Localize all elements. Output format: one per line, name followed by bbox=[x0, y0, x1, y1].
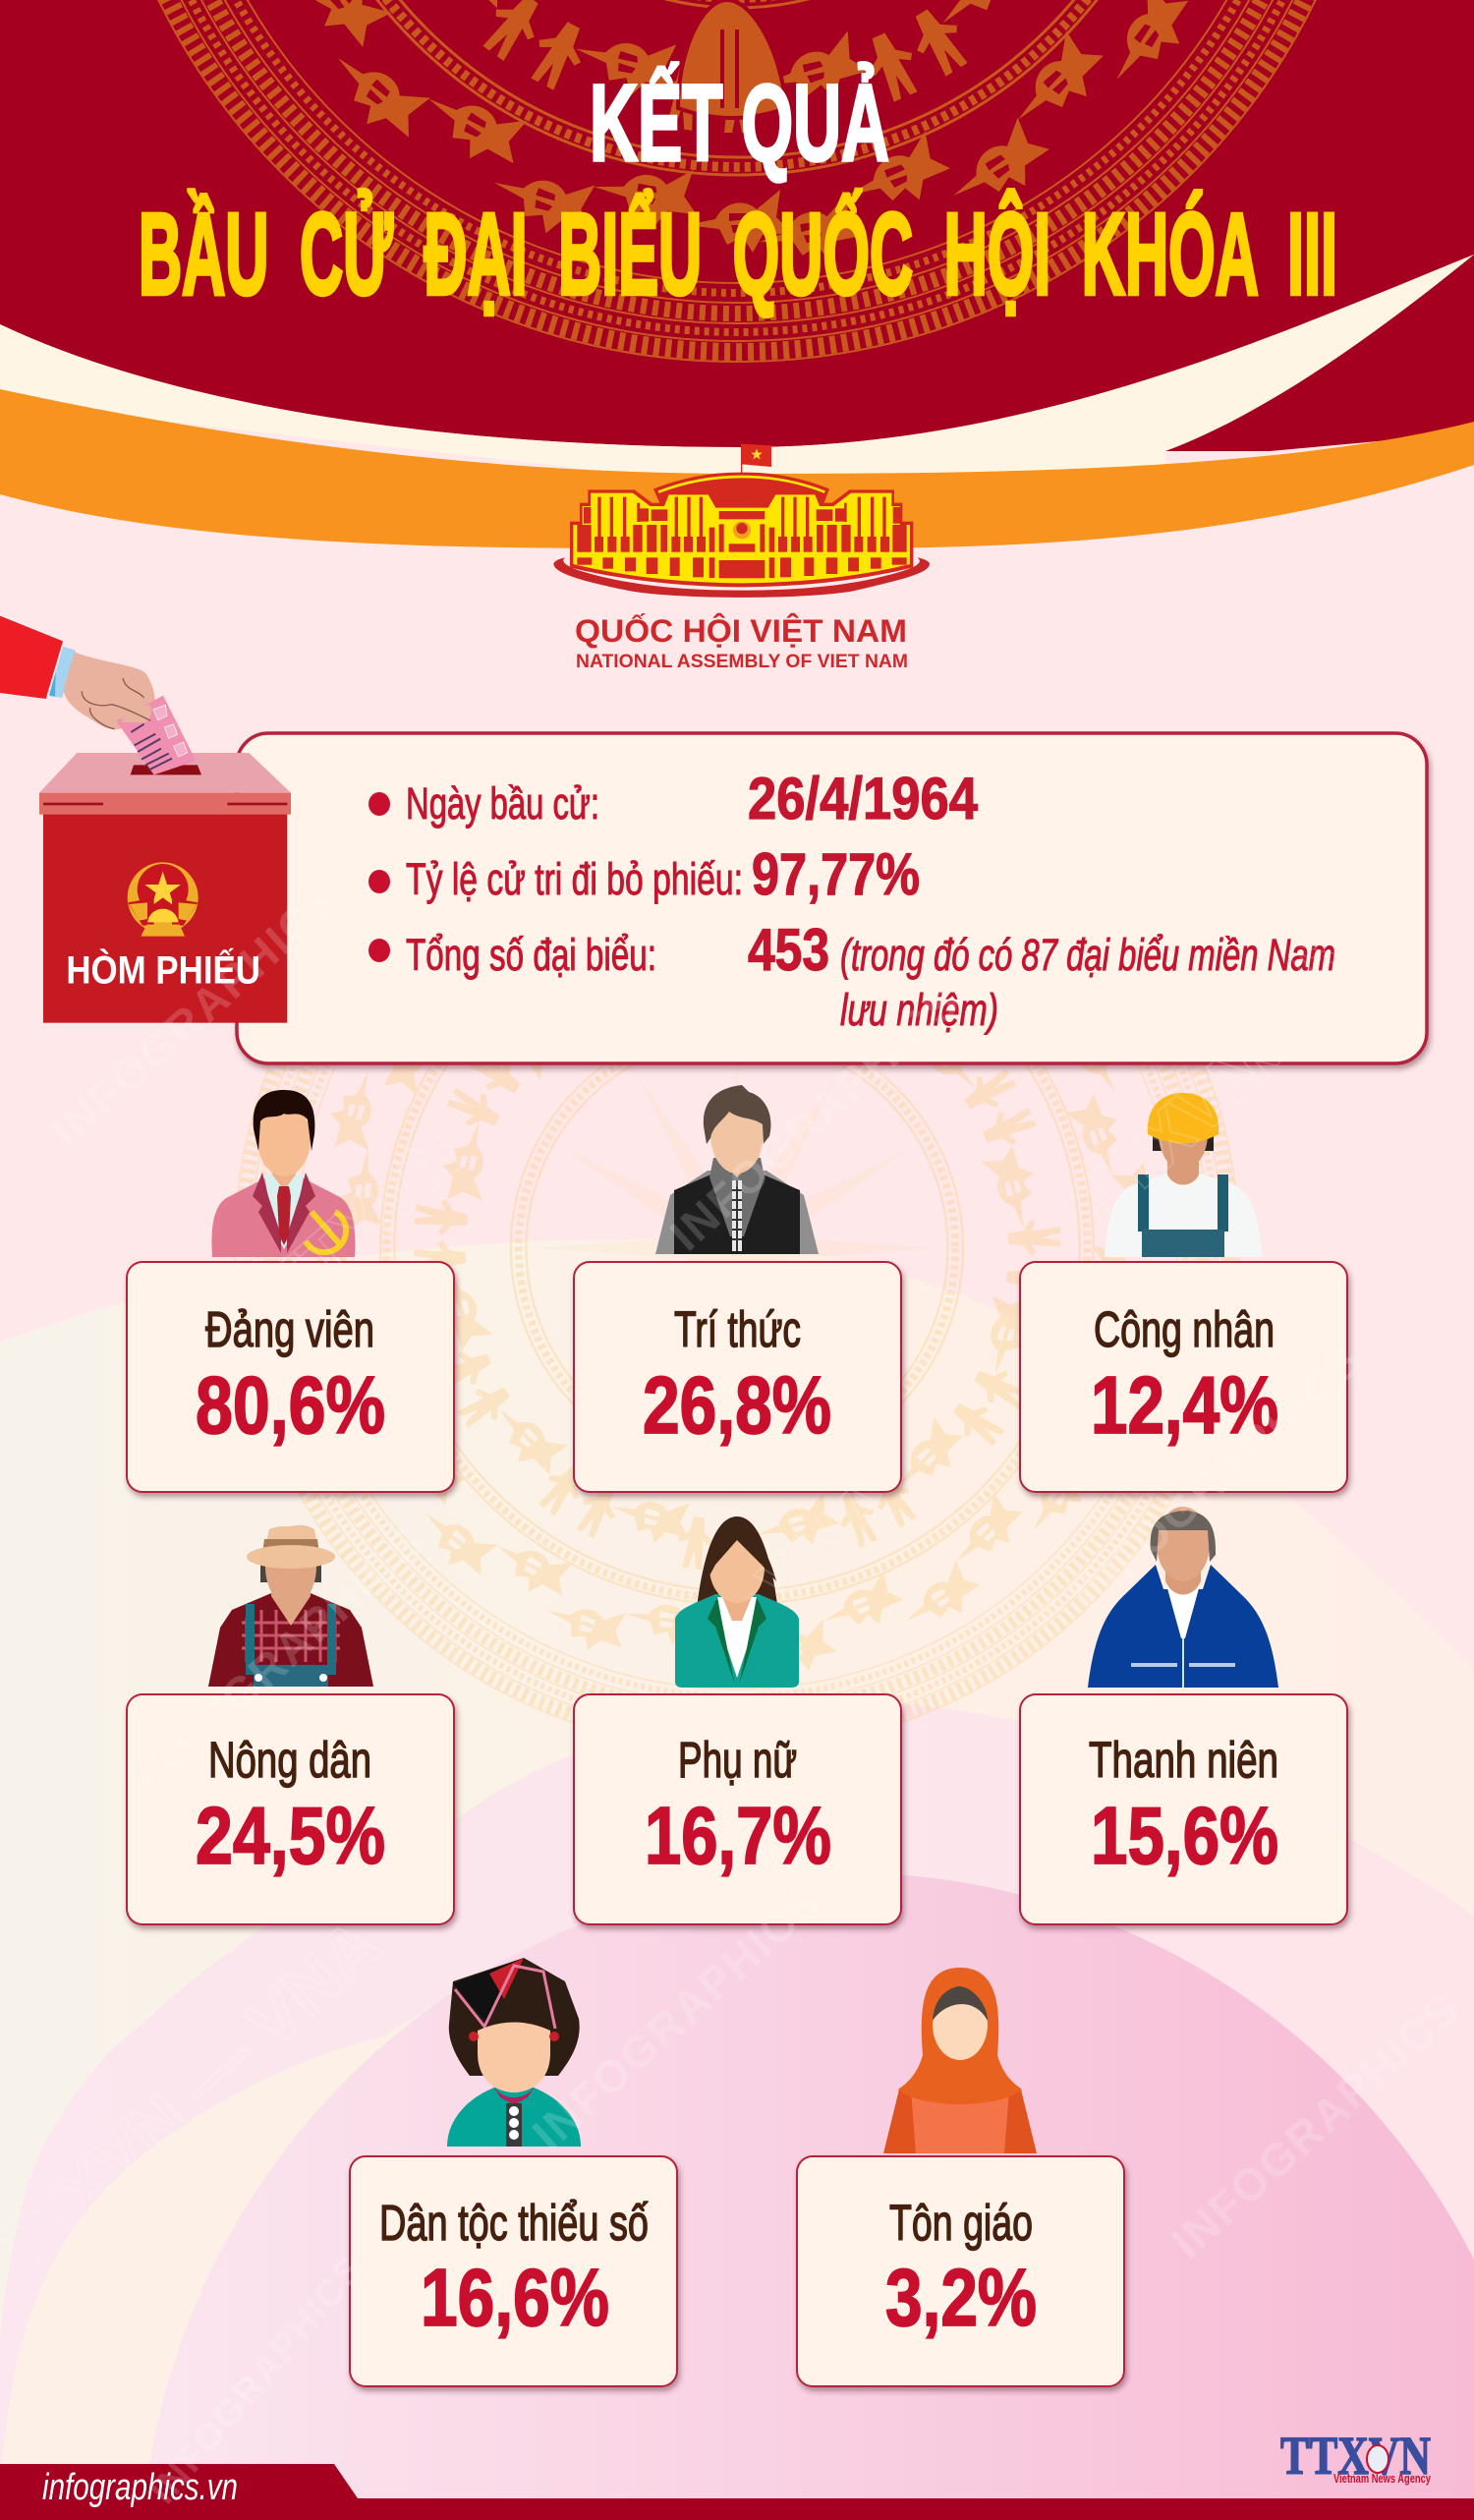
card: workers: Công nhân bbox=[1094, 1301, 1275, 1357]
card: party members: 80,6% bbox=[196, 1359, 385, 1451]
card: party members: Đảng viên bbox=[205, 1301, 374, 1357]
icon: parliament building bbox=[553, 444, 930, 598]
background: cream band bbox=[2, 1912, 688, 2496]
cream swoosh bbox=[0, 255, 1474, 487]
watermarks: INFOGRAPHICS bbox=[1162, 1982, 1471, 2267]
election date row bbox=[368, 766, 979, 831]
card: farmers: Nông dân bbox=[208, 1732, 371, 1788]
panel: election facts bbox=[237, 733, 1427, 1063]
top red banner bbox=[0, 0, 1474, 447]
card: religion: Tôn giáo bbox=[889, 2195, 1033, 2251]
person: farmer bbox=[208, 1525, 373, 1687]
red wedge on right bbox=[1165, 255, 1474, 451]
card: workers bbox=[1020, 1262, 1347, 1492]
watermarks: INFOGRAPHICS bbox=[142, 2248, 373, 2512]
card: workers: 12,4% bbox=[1091, 1359, 1278, 1451]
person: party member bbox=[211, 1090, 355, 1257]
bronze drum pattern in banner bbox=[93, 0, 1381, 362]
icon: national emblem bbox=[128, 862, 198, 937]
card: intellectuals bbox=[574, 1262, 901, 1492]
election date row: 26/4/1964 bbox=[748, 766, 979, 831]
card: women: 16,7% bbox=[645, 1790, 831, 1881]
card: party members bbox=[127, 1262, 454, 1492]
card: youth: 15,6% bbox=[1091, 1790, 1278, 1881]
watermarks: INFOGRAPHICS bbox=[1063, 1334, 1373, 1619]
person: youth bbox=[1088, 1507, 1278, 1688]
watermarks bbox=[0, 872, 1471, 2512]
card: farmers bbox=[127, 1694, 454, 1924]
person: religious follower bbox=[883, 1968, 1037, 2153]
election date row: Ngày bầu cử: bbox=[406, 778, 599, 829]
card: religion: 3,2% bbox=[885, 2252, 1037, 2343]
turnout row: Tỷ lệ cử tri đi bỏ phiếu: bbox=[406, 854, 743, 904]
card: youth bbox=[1020, 1694, 1347, 1924]
footer website: infographics.vn bbox=[42, 2467, 238, 2508]
background: large pink circle bbox=[142, 1872, 1474, 2520]
total delegates row: 453 bbox=[748, 917, 829, 983]
icon: ballot box with hand bbox=[0, 616, 291, 1023]
background: cream arc bbox=[0, 1239, 1474, 2520]
TTXVN agency logo: TTXVN bbox=[1280, 2426, 1431, 2486]
background: light pink arc bbox=[0, 1701, 1474, 2520]
card: farmers: 24,5% bbox=[196, 1790, 385, 1881]
person: intellectual bbox=[655, 1085, 819, 1254]
background: bronze drum watermark bbox=[235, 746, 1239, 1750]
person: worker bbox=[1105, 1093, 1262, 1257]
watermarks: VNA bbox=[1215, 921, 1360, 1089]
watermarks: INFOGRAPHICS bbox=[125, 1516, 434, 1801]
watermarks: INFOGRAPHICS bbox=[660, 975, 970, 1260]
card: ethnic minorities: Dân tộc thiểu số bbox=[379, 2195, 649, 2251]
card: intellectuals: 26,8% bbox=[643, 1359, 831, 1451]
card: women bbox=[574, 1694, 901, 1924]
ballot box label: HÒM PHIẾU bbox=[66, 949, 260, 993]
card: ethnic minorities bbox=[350, 2156, 677, 2386]
card: women: Phụ nữ bbox=[678, 1732, 797, 1788]
total delegates row: lưu nhiệm) bbox=[840, 985, 998, 1035]
watermarks: VNA bbox=[744, 1465, 908, 1624]
turnout row bbox=[368, 841, 920, 907]
watermarks: TTXVN bbox=[1058, 1027, 1283, 1240]
person: ethnic minority bbox=[447, 1958, 581, 2147]
total delegates row: Tổng số đại biểu: bbox=[406, 930, 656, 980]
total delegates row bbox=[368, 917, 1335, 1035]
logo name English: NATIONAL ASSEMBLY OF VIET NAM bbox=[576, 652, 908, 672]
footer red bar bbox=[0, 2464, 1474, 2520]
hut motif in drum band bbox=[678, 0, 786, 118]
National Assembly logo bbox=[553, 444, 930, 672]
card: ethnic minorities: 16,6% bbox=[421, 2252, 609, 2343]
watermarks: INFOGRAPHICS bbox=[41, 872, 351, 1157]
person: woman bbox=[675, 1517, 799, 1688]
card: youth: Thanh niên bbox=[1089, 1732, 1278, 1788]
watermarks: INFOGRAPHICS bbox=[523, 1874, 832, 2159]
orange swoosh bbox=[0, 389, 1474, 548]
watermarks: TTXVN bbox=[253, 1116, 478, 1329]
card: religion bbox=[797, 2156, 1124, 2386]
TTXVN agency logo: Vietnam News Agency bbox=[1333, 2471, 1432, 2486]
card: intellectuals: Trí thức bbox=[674, 1301, 801, 1357]
turnout row: 97,77% bbox=[752, 841, 920, 907]
logo name Vietnamese: QUỐC HỘI VIỆT NAM bbox=[575, 613, 907, 649]
title line 1: KẾT QUẢ bbox=[590, 63, 889, 184]
